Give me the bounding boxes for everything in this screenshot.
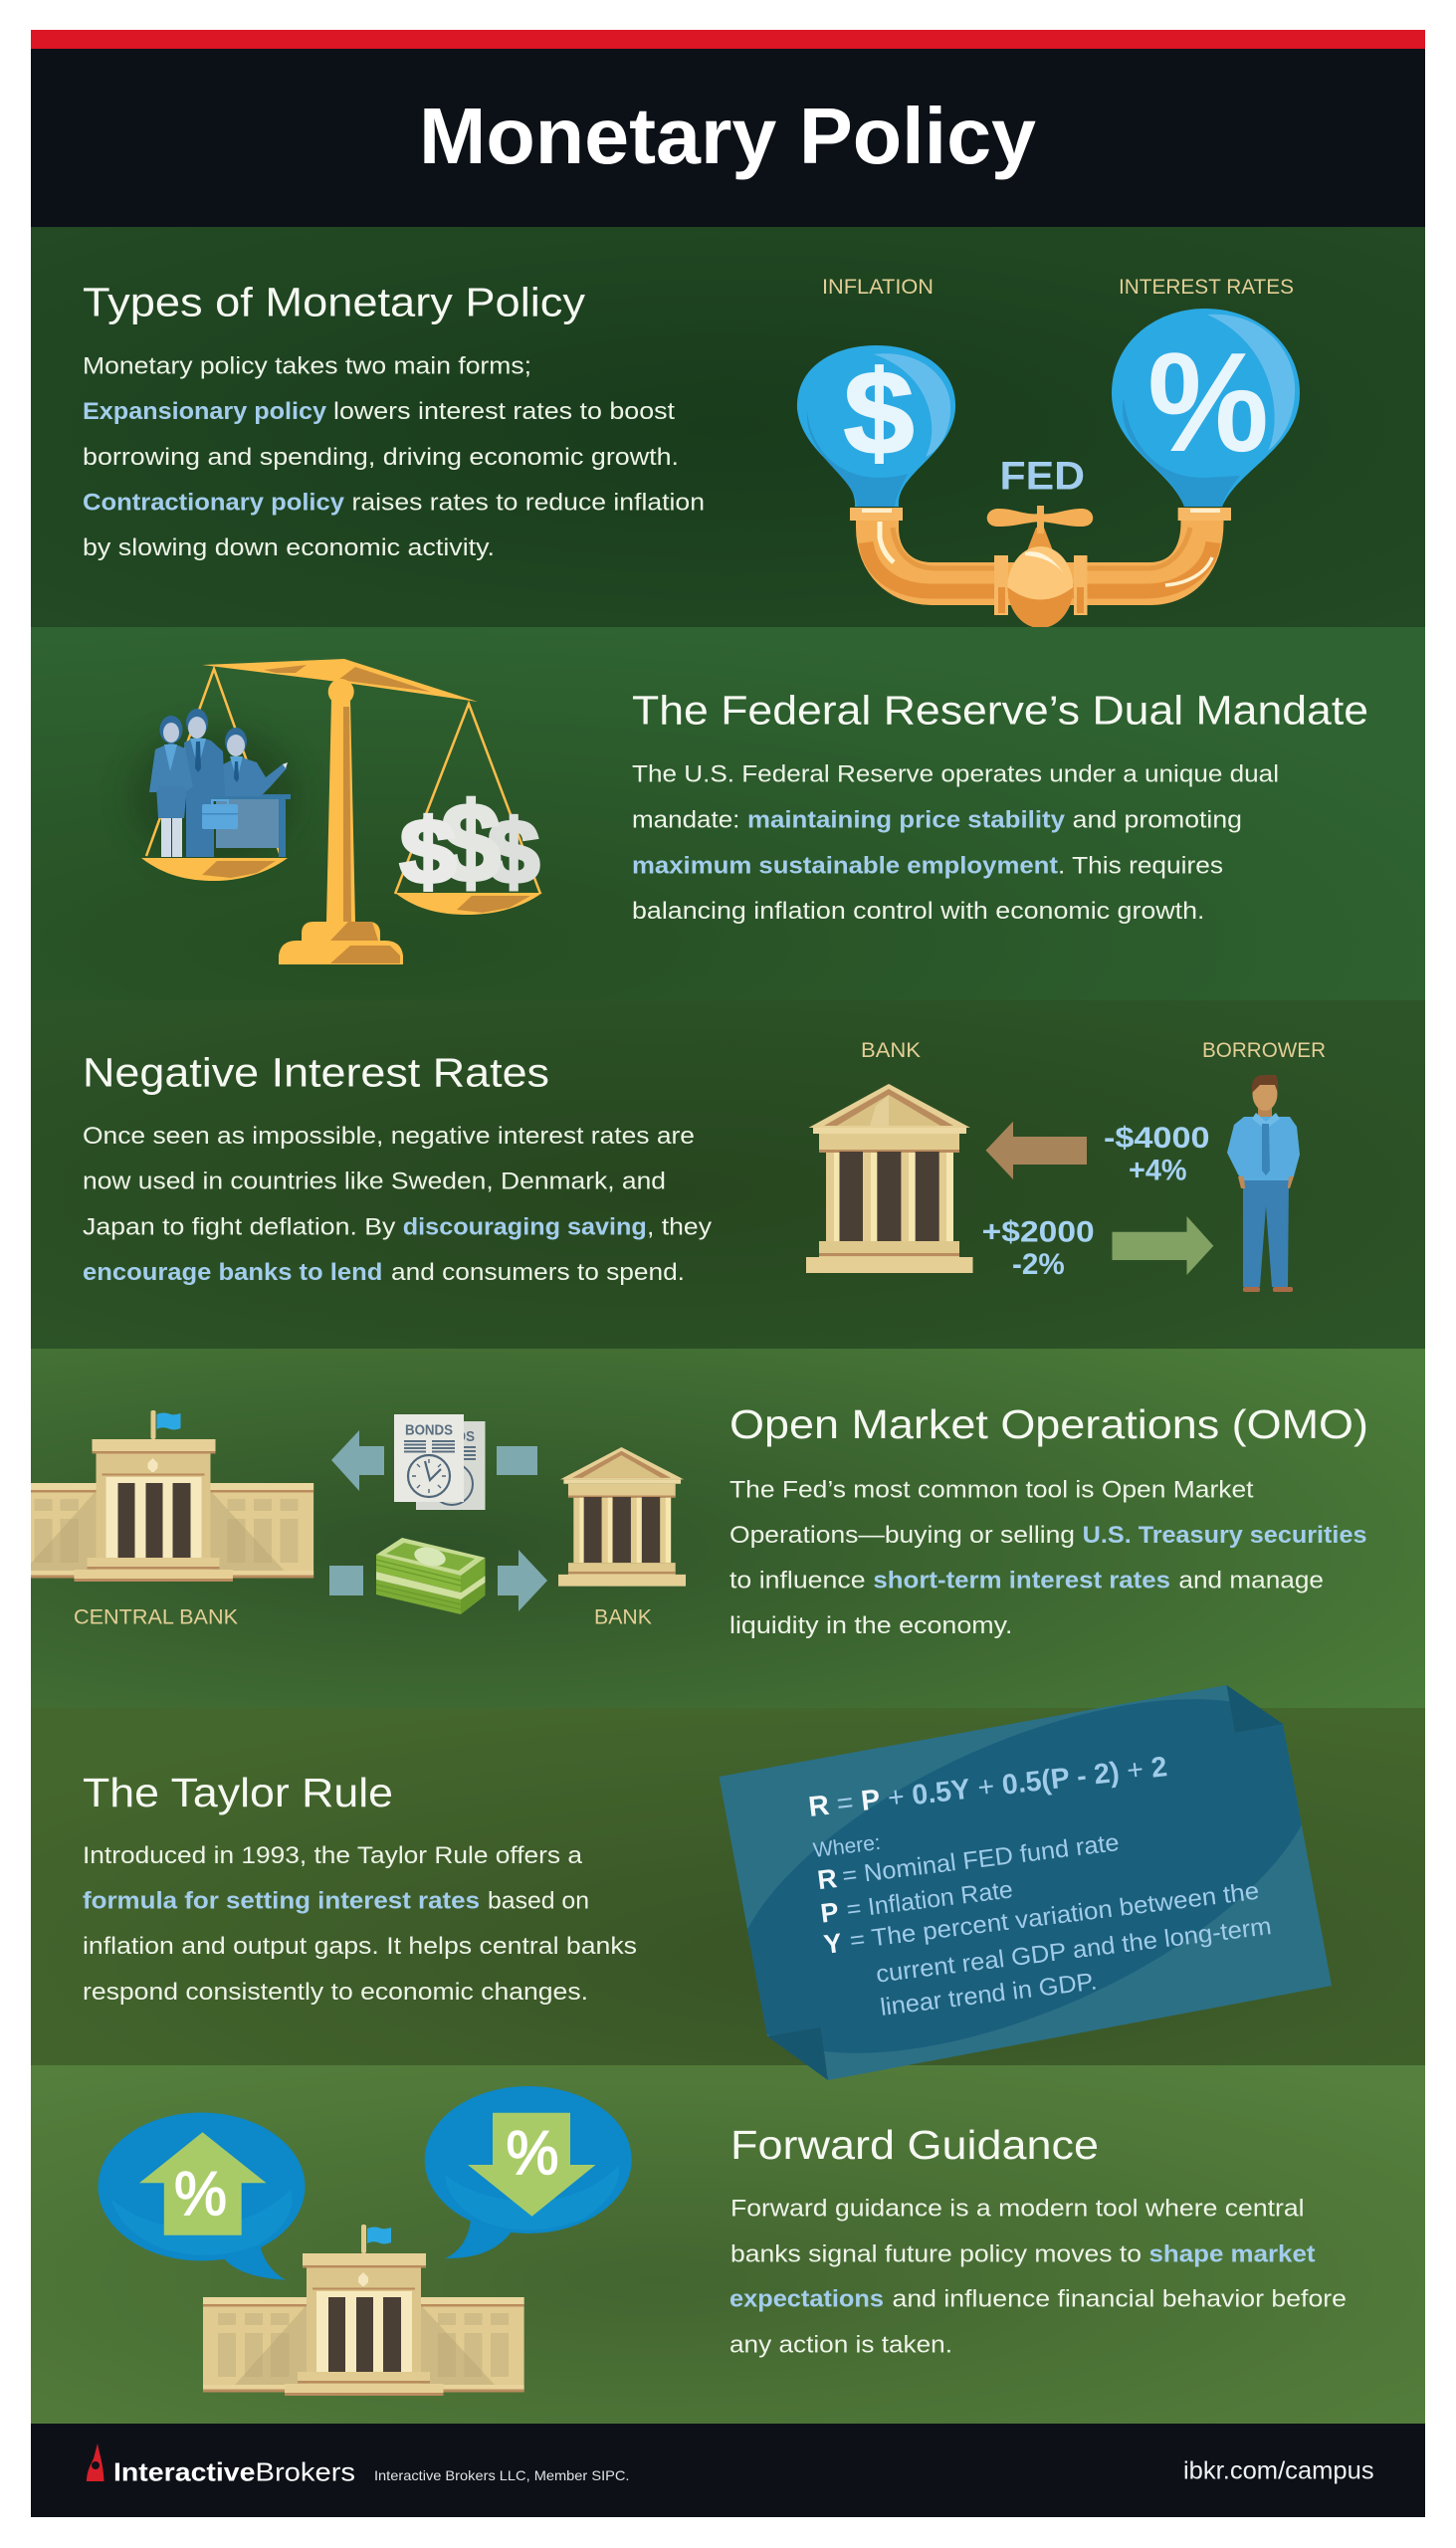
text block: types: Monetary policy takes two main forms; <box>83 352 531 380</box>
text block: forward guidance: shape market <box>1148 2240 1316 2267</box>
panel: taylor rule <box>31 1685 1425 2080</box>
text block: negative rates <box>83 1123 713 1286</box>
text block: dual mandate: maintaining price stability <box>747 806 1065 833</box>
text block: types: Expansionary policy <box>83 398 326 425</box>
text block: types: Contractionary policy <box>83 490 344 516</box>
text block: taylor rule: based on <box>488 1887 589 1915</box>
text: member notice: Interactive Brokers LLC, Member SIPC. <box>374 2467 629 2483</box>
text block: dual mandate: . This requires <box>1058 852 1223 879</box>
icon: rates down bubble: % <box>506 2119 559 2188</box>
panel: dual mandate <box>31 627 1425 1000</box>
logo: Interactive Brokers: Brokers <box>255 2457 355 2487</box>
numbers: bank pays: -2% <box>1012 1248 1065 1281</box>
numbers: borrower pays <box>1104 1122 1210 1187</box>
icon: people and desk <box>149 709 291 857</box>
icon: money stacks <box>376 1538 486 1614</box>
footer <box>31 2424 1425 2517</box>
formula legend <box>812 1829 1273 2021</box>
icon: interest rates balloon: % <box>1147 323 1269 482</box>
arrow: borrower to bank <box>985 1122 1087 1179</box>
text block: dual mandate: mandate: <box>632 806 739 833</box>
icon: inflation balloon <box>797 345 955 507</box>
heading: dual mandate: The Federal Reserve’s Dual Mandate <box>632 687 1368 733</box>
text block: forward guidance: Forward guidance is a modern tool where central <box>730 2195 1305 2222</box>
label: bank: BANK <box>594 1606 652 1629</box>
text block: dual mandate <box>632 760 1279 925</box>
text block: negative rates: now used in countries like Sweden, Denmark, and <box>83 1168 666 1194</box>
text block: dual mandate: The U.S. Federal Reserve operates under a unique dual <box>632 760 1279 787</box>
heading: forward guidance: Forward Guidance <box>730 2122 1099 2168</box>
arrow: money to bank <box>329 1550 547 1611</box>
formula legend: current real GDP and the long-term <box>875 1913 1273 1989</box>
text block: negative rates: and consumers to spend. <box>391 1259 685 1286</box>
panel: negative interest rates <box>31 1000 1425 1349</box>
text block: dual mandate: and promoting <box>1073 806 1242 833</box>
label: borrower: BORROWER <box>1202 1039 1326 1062</box>
formula legend: P <box>819 1897 840 1929</box>
text block: negative rates: discouraging saving <box>403 1213 647 1240</box>
text block: forward guidance: banks signal future policy moves to <box>730 2240 1142 2267</box>
text block: taylor rule: inflation and output gaps. It helps central banks <box>83 1933 637 1960</box>
label: inflation: INFLATION <box>822 276 934 299</box>
heading: negative interest rates: Negative Interest Rates <box>83 1050 549 1096</box>
icon: rates up bubble: % <box>174 2160 227 2229</box>
title banner <box>31 49 1425 227</box>
text block: types: raises rates to reduce inflation <box>352 490 705 516</box>
text block: negative rates: encourage banks to lend <box>83 1259 382 1286</box>
heading: taylor rule: The Taylor Rule <box>83 1770 393 1815</box>
icon: borrower <box>1227 1075 1300 1292</box>
icon: dollar signs <box>400 780 539 905</box>
logo: Interactive Brokers <box>87 2443 355 2487</box>
heading: OMO: Open Market Operations (OMO) <box>729 1401 1368 1447</box>
numbers: bank pays: +$2000 <box>982 1215 1095 1248</box>
label: central bank: CENTRAL BANK <box>74 1606 238 1629</box>
text block: types: lowers interest rates to boost <box>333 398 675 425</box>
icon: rates up bubble <box>98 2112 305 2280</box>
icon: interest rates balloon <box>1112 309 1300 507</box>
label: bank: BANK <box>861 1039 921 1062</box>
text block: types <box>83 352 705 561</box>
formula legend: linear trend in GDP. <box>879 1968 1099 2021</box>
formula legend: = Inflation Rate <box>845 1876 1014 1924</box>
text block: forward guidance: any action is taken. <box>729 2332 952 2359</box>
text block: types: borrowing and spending, driving economic growth. <box>83 444 679 471</box>
text block: taylor rule: formula for setting interest rates <box>83 1887 480 1915</box>
arrow: bonds to central bank <box>331 1430 537 1491</box>
text block: taylor rule: respond consistently to economic changes. <box>83 1979 588 2006</box>
logo: Interactive Brokers: Interactive <box>113 2457 255 2487</box>
text block: forward guidance <box>729 2195 1347 2359</box>
icon: pipe and valve <box>850 506 1231 628</box>
text: bonds label: BONDS <box>405 1423 453 1439</box>
text block: dual mandate: balancing inflation control with economic growth. <box>632 898 1204 925</box>
text block: OMO: liquidity in the economy. <box>729 1612 1013 1639</box>
label: interest rates: INTEREST RATES <box>1119 276 1294 299</box>
text block: OMO: Operations—buying or selling <box>729 1522 1075 1549</box>
numbers: borrower pays: -$4000 <box>1104 1122 1210 1155</box>
formula legend: = Nominal FED fund rate <box>841 1829 1121 1890</box>
label: FED: FED <box>999 455 1085 499</box>
icon: inflation balloon: $ <box>844 346 915 480</box>
arrow: bank to borrower <box>1113 1216 1213 1275</box>
text block: OMO <box>729 1476 1367 1639</box>
text block: forward guidance: expectations <box>729 2286 884 2313</box>
icon: dollar signs: $ <box>400 801 456 903</box>
icon: central bank building <box>203 2225 524 2396</box>
panel: open market operations <box>0 1349 1425 1708</box>
text block: forward guidance: and influence financial behavior before <box>892 2286 1347 2313</box>
formula legend: Y <box>822 1928 844 1960</box>
icon: dollar signs: $ <box>488 803 539 903</box>
text block: OMO: and manage <box>1178 1568 1324 1594</box>
numbers: bank pays <box>982 1215 1095 1281</box>
title: Monetary Policy <box>419 92 1037 180</box>
text block: negative rates: , they <box>647 1213 713 1240</box>
formula legend: Where: <box>812 1831 882 1862</box>
formula legend: = The percent variation between the <box>848 1878 1261 1955</box>
icon: commercial bank <box>558 1447 686 1587</box>
icon: bank building <box>806 1084 973 1273</box>
numbers: borrower pays: +4% <box>1129 1155 1186 1187</box>
text block: OMO: The Fed’s most common tool is Open Market <box>729 1476 1254 1503</box>
text block: OMO: short-term interest rates <box>873 1568 1170 1594</box>
heading: types of monetary policy: Types of Monetary Policy <box>83 279 586 324</box>
text block: dual mandate: maximum sustainable employment <box>632 852 1058 879</box>
panel: forward guidance <box>31 2065 1425 2425</box>
text block: taylor rule: Introduced in 1993, the Taylor Rule offers a <box>83 1842 582 1869</box>
text block: OMO: U.S. Treasury securities <box>1083 1522 1367 1549</box>
icon: bonds: BONDS <box>427 1429 475 1445</box>
icon: bonds <box>394 1414 486 1510</box>
text: site url: ibkr.com/campus <box>1183 2457 1374 2485</box>
panel: types of monetary policy <box>31 227 1425 628</box>
formula: R = P + 0.5Y + 0.5(P - 2) + 2 <box>807 1751 1168 1823</box>
icon: central bank <box>0 1410 313 1582</box>
text block: taylor rule <box>83 1842 637 2006</box>
icon: rates down bubble <box>425 2086 632 2258</box>
text block: OMO: to influence <box>729 1568 866 1594</box>
text block: negative rates: Japan to fight deflation. By <box>83 1213 396 1240</box>
icon: scale <box>129 659 542 964</box>
icon: dollar signs: $ <box>441 780 501 905</box>
text block: negative rates: Once seen as impossible, negative interest rates are <box>83 1123 695 1150</box>
formula legend: R <box>816 1863 839 1895</box>
text block: types: by slowing down economic activity. <box>83 534 495 561</box>
note: formula card <box>719 1685 1332 2080</box>
top red bar <box>31 30 1425 49</box>
